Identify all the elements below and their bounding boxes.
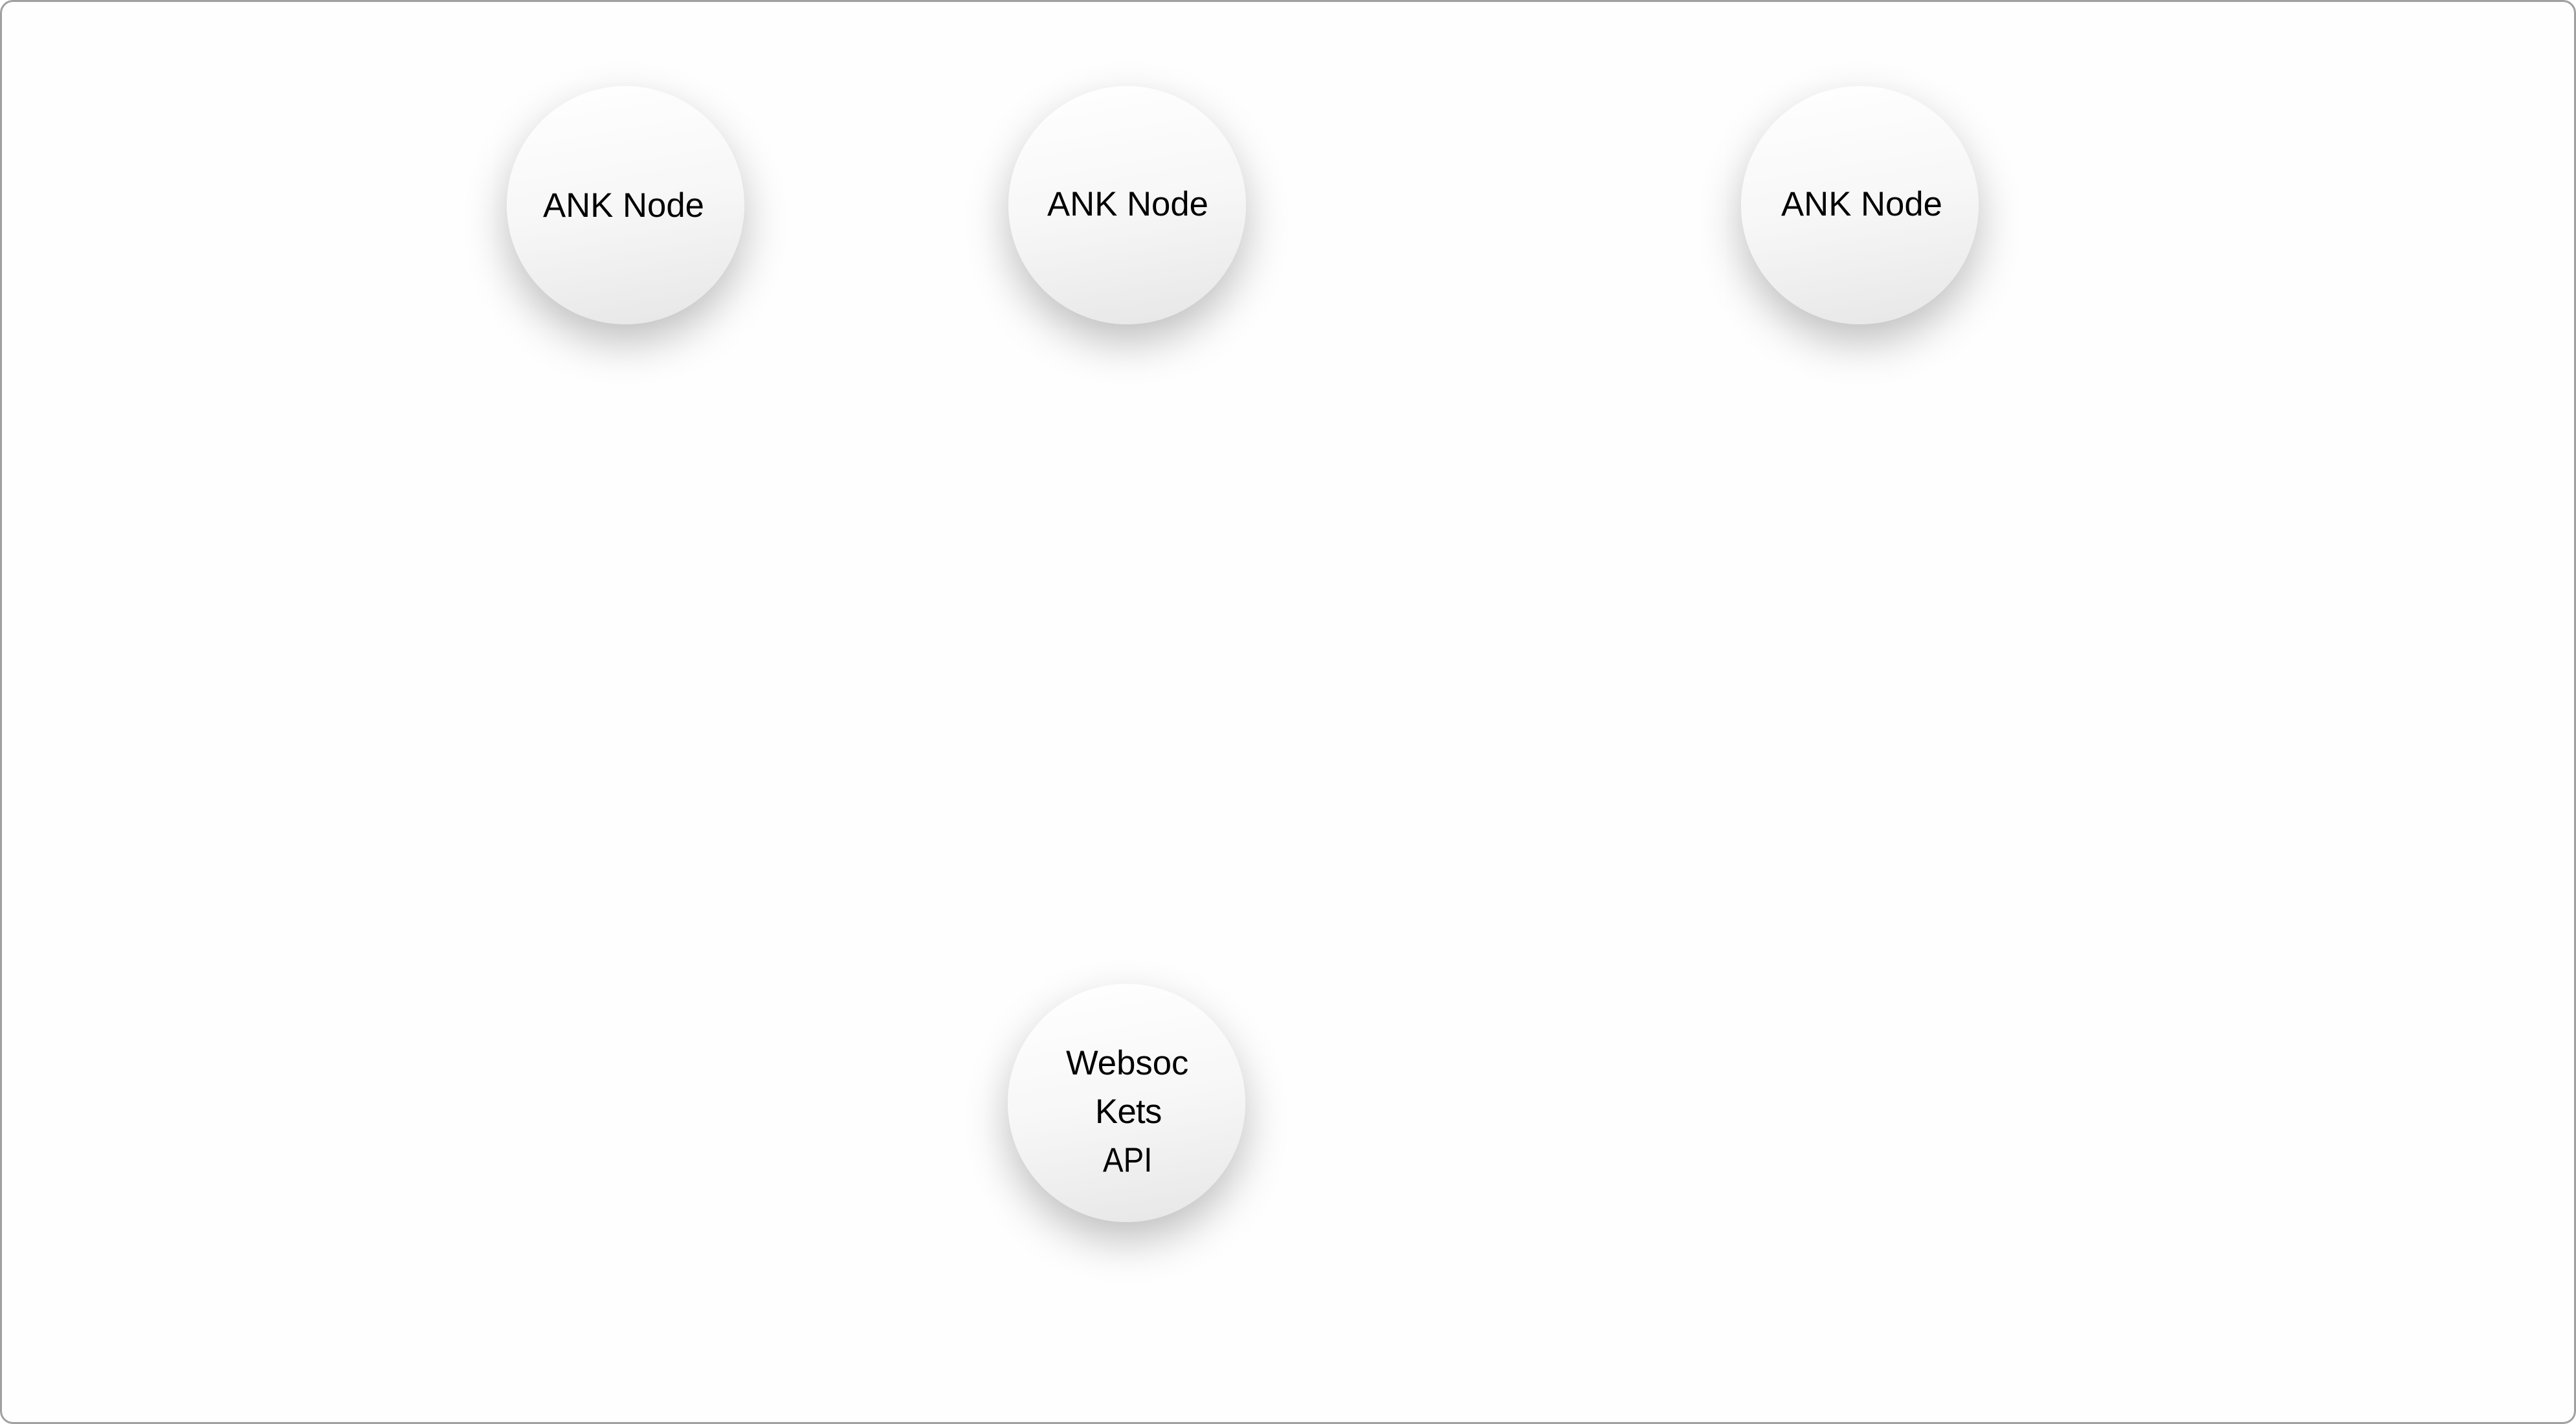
node: ANK Node left <box>507 86 744 324</box>
node: ANK Node right <box>1741 86 1979 324</box>
label: Kets: Kets <box>1095 1093 1162 1131</box>
node: Websockets API <box>1008 984 1245 1222</box>
label: ANK Node middle: ANK Node <box>1047 185 1208 223</box>
node: ANK Node middle <box>1008 86 1246 324</box>
label: API: API <box>1103 1141 1152 1179</box>
label: Websoc: Websoc <box>1066 1044 1188 1082</box>
label: ANK Node left: ANK Node <box>543 186 704 225</box>
label: ANK Node right: ANK Node <box>1781 185 1942 223</box>
